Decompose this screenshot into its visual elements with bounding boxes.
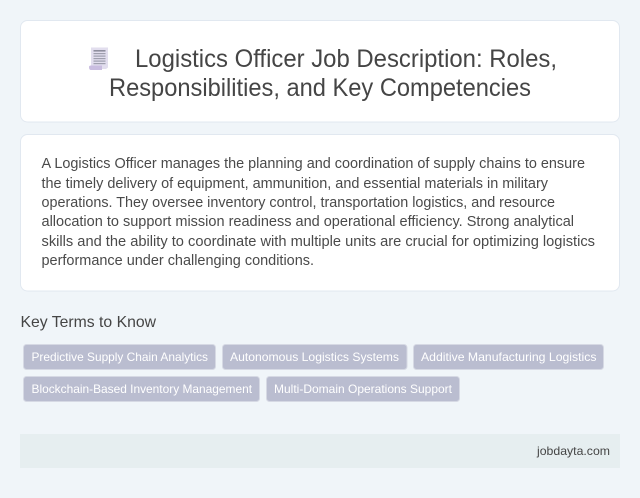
- tag: predictive supply chain analytics: Predictive Supply Chain Analytics: [32, 350, 208, 364]
- heading: key terms: Key Terms to Know: [20, 314, 156, 331]
- footer: jobdayta.com: [536, 444, 610, 458]
- text block: description: performance under challenging conditions.: [42, 253, 314, 269]
- footer: [20, 434, 620, 468]
- panel: description: [20, 134, 620, 291]
- tag: additive manufacturing logistics: [414, 344, 604, 370]
- text block: description: skills and the ability to coordinate with multiple units are crucial for optimizing logistics: [42, 234, 595, 250]
- heading: title: [109, 45, 557, 102]
- text block: description: the timely delivery of equipment, ammunition, and essential materials in military: [42, 176, 549, 192]
- panel: title header: [20, 20, 620, 122]
- icon: document: [89, 48, 108, 70]
- heading: title: Responsibilities, and Key Competencies: [109, 74, 531, 102]
- tag: autonomous logistics systems: Autonomous Logistics Systems: [230, 350, 399, 364]
- text block: description: A Logistics Officer manages the planning and coordination of supply chains to ensure: [42, 156, 585, 172]
- tag: predictive supply chain analytics: [24, 344, 216, 370]
- tag: blockchain-based inventory management: [24, 376, 260, 402]
- text block: description: allocation to support mission readiness and operational efficiency. Strong analytical: [42, 214, 574, 230]
- text block: description: operations. They oversee inventory control, transportation logistics, and resource: [42, 195, 555, 211]
- heading: title: Logistics Officer Job Description: Roles,: [135, 45, 557, 73]
- tag: blockchain-based inventory management: Blockchain-Based Inventory Management: [32, 382, 253, 396]
- tag: additive manufacturing logistics: Additive Manufacturing Logistics: [421, 350, 596, 364]
- tag: multi-domain operations support: Multi-Domain Operations Support: [274, 382, 453, 396]
- tag: autonomous logistics systems: [222, 344, 407, 370]
- text block: description: [42, 156, 595, 269]
- tag: multi-domain operations support: [266, 376, 460, 402]
